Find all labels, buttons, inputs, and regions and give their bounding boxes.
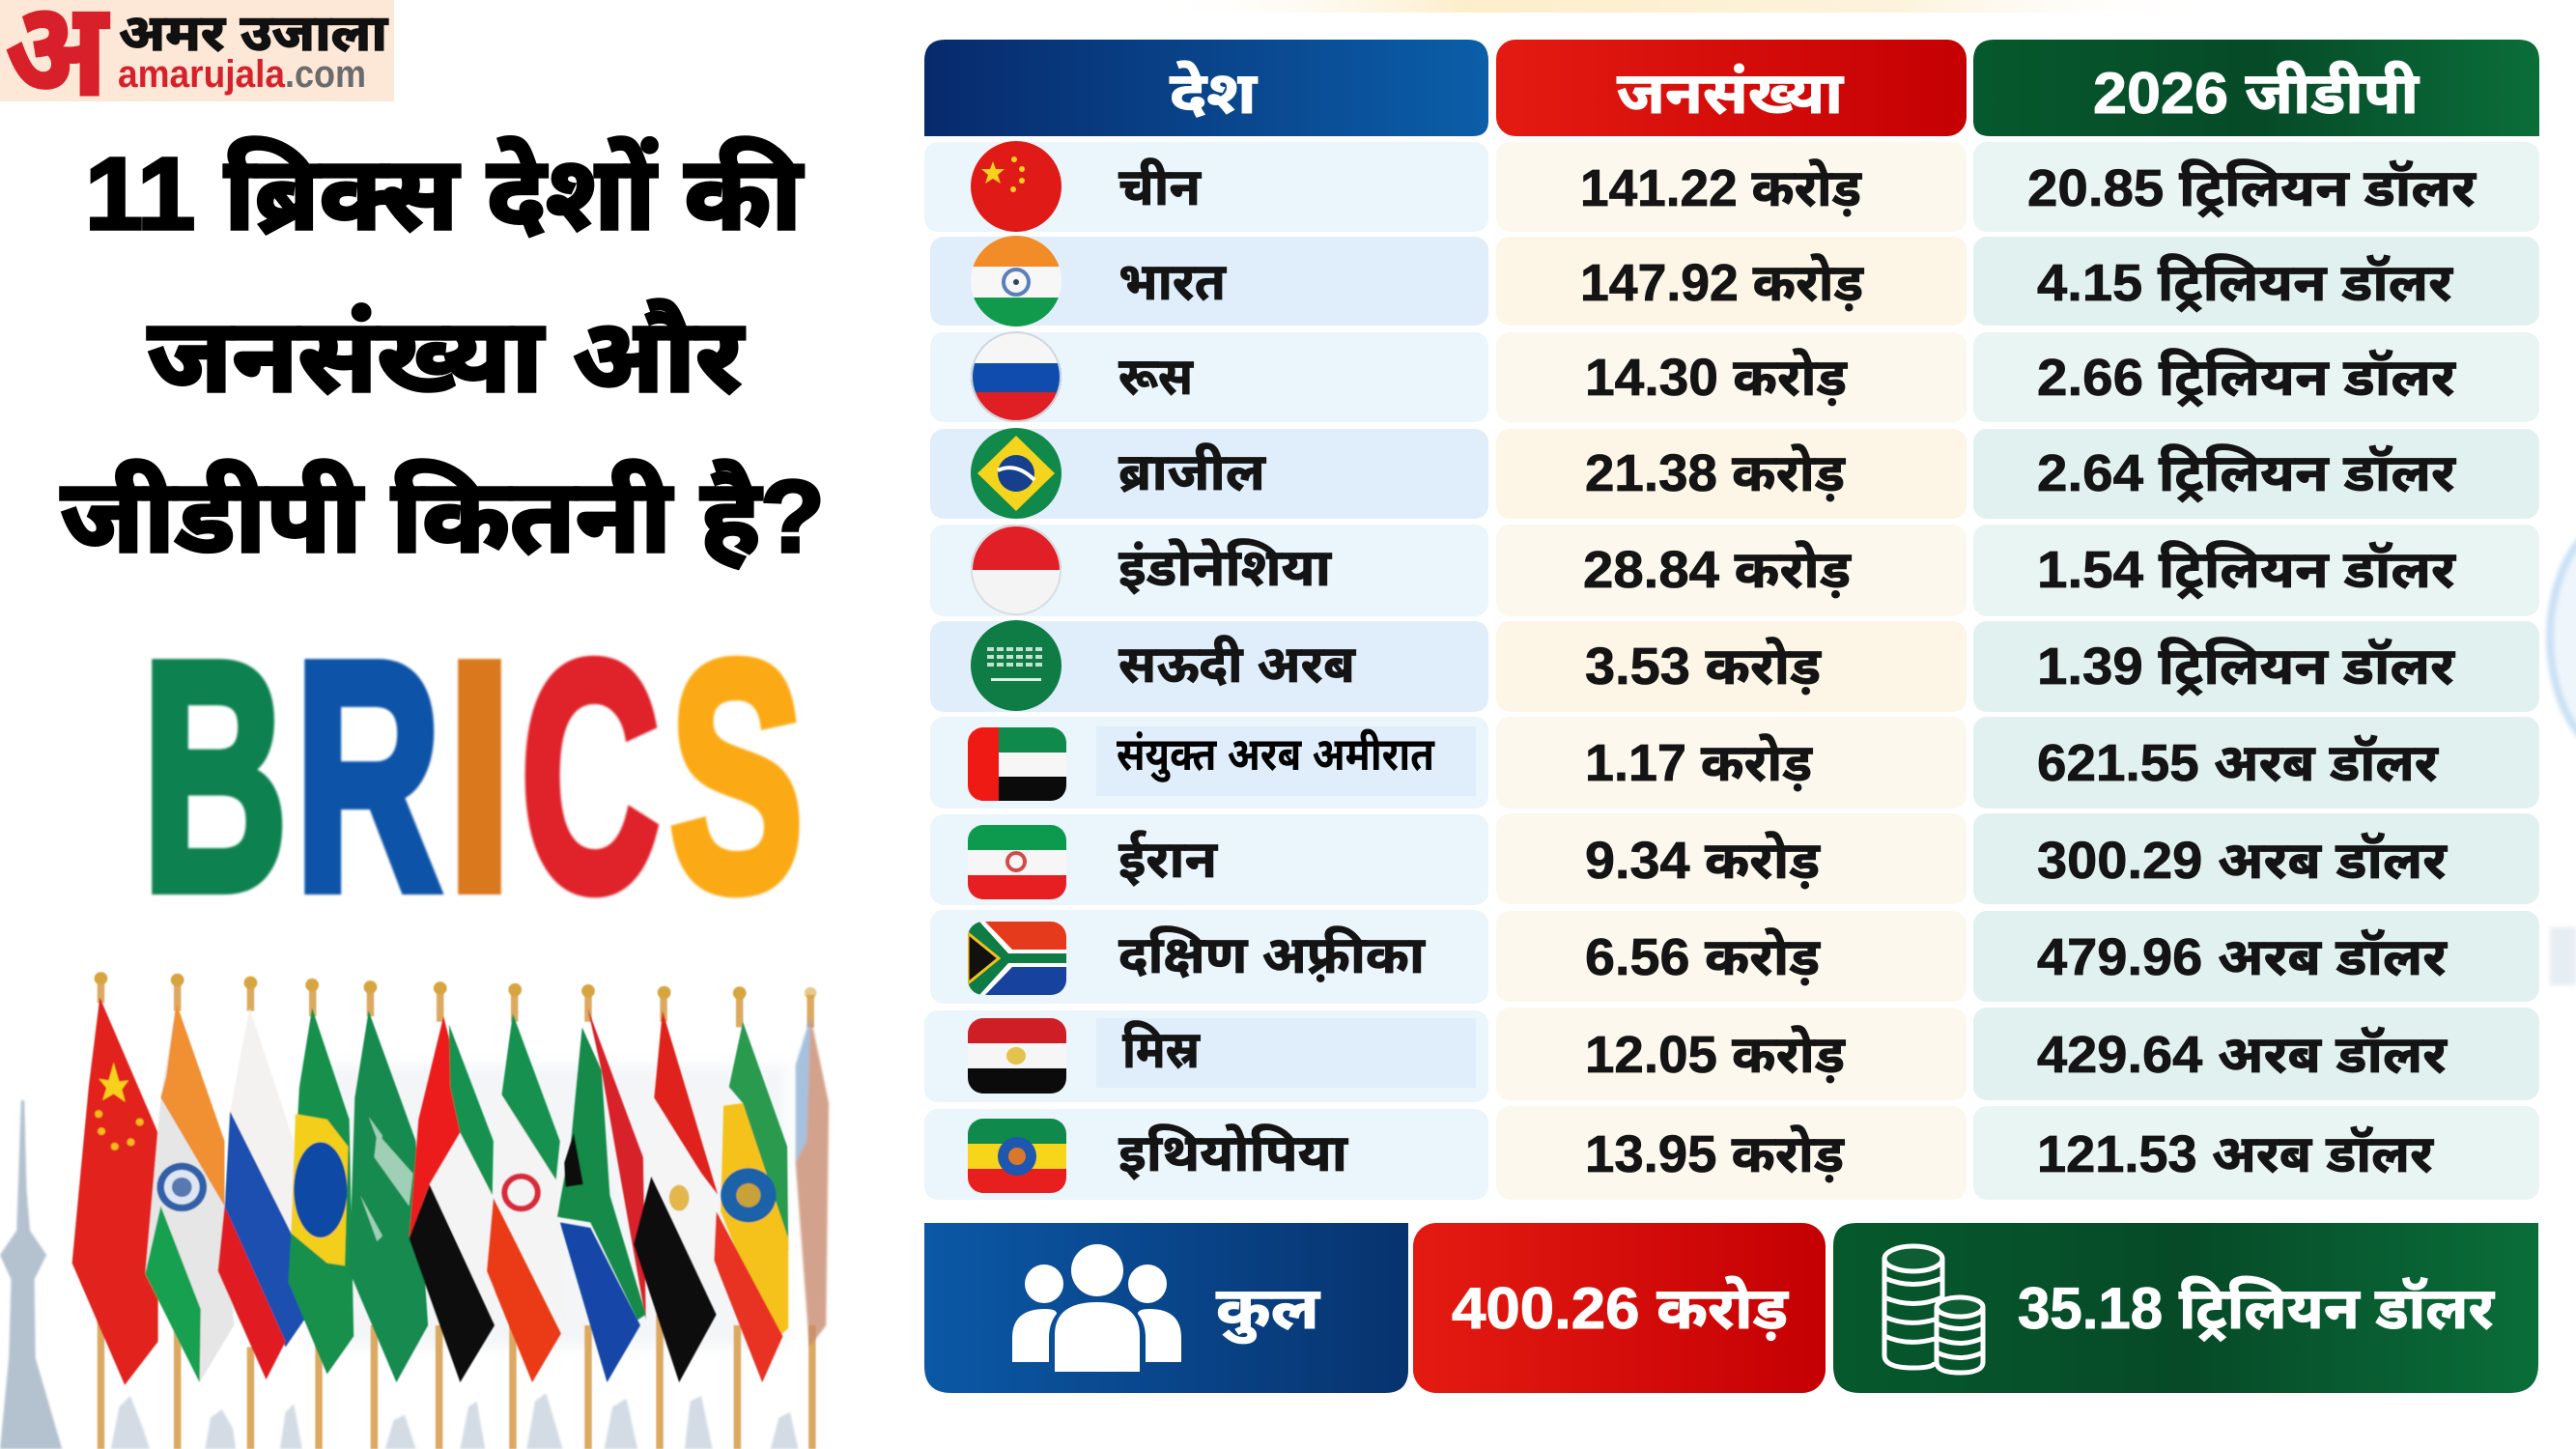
row: UAE: संयुक्त अरब अमीरात <box>1117 728 1435 781</box>
flag: Saudi Arabia <box>350 1011 428 1382</box>
row: China: चीन <box>1118 157 1203 216</box>
row: Brazil <box>930 425 2539 522</box>
total: population: 400.26 करोड़ <box>1452 1276 1789 1341</box>
BRICS wordmark: R <box>295 595 441 958</box>
row: UAE: 1.17 करोड़ <box>1585 733 1813 792</box>
flag: Russia <box>218 1009 306 1379</box>
BRICS wordmark: I <box>446 595 513 958</box>
row: South Africa <box>930 910 2539 1004</box>
flag: UAE <box>410 1016 495 1382</box>
row: Indonesia: इंडोनेशिया <box>1118 538 1332 597</box>
row: Russia: 2.66 ट्रिलियन डॉलर <box>2037 348 2456 408</box>
row: Egypt <box>924 1008 2539 1102</box>
row: UAE: 621.55 अरब डॉलर <box>2037 734 2439 792</box>
flag: faded <box>796 1016 829 1347</box>
row: Egypt: 429.64 अरब डॉलर <box>2037 1026 2448 1084</box>
row: China: 141.22 करोड़ <box>1580 158 1862 217</box>
row: Iran: 9.34 करोड़ <box>1585 831 1821 890</box>
BRICS wordmark: B <box>142 595 288 958</box>
row: Iran: ईरान <box>1118 830 1219 889</box>
row: South Africa: दक्षिण अफ़्रीका <box>1118 925 1426 984</box>
row: India: भारत <box>1118 253 1227 311</box>
row: South Africa: 479.96 अरब डॉलर <box>2037 928 2448 986</box>
title <box>61 136 825 574</box>
row: Ethiopia <box>924 1106 2539 1200</box>
row: Ethiopia: 13.95 करोड़ <box>1585 1124 1845 1183</box>
BRICS wordmark <box>142 595 804 958</box>
row: Ethiopia: इथियोपिया <box>1118 1123 1348 1182</box>
row: Indonesia: 1.54 ट्रिलियन डॉलर <box>2037 540 2456 600</box>
row: Brazil: 2.64 ट्रिलियन डॉलर <box>2037 443 2456 503</box>
flag: India <box>145 1003 234 1382</box>
row: Russia <box>930 328 2539 427</box>
flag: Egypt <box>634 1011 718 1382</box>
row: South Africa: 6.56 करोड़ <box>1585 927 1821 986</box>
total: population <box>1413 1223 1826 1393</box>
table header: GDP <box>1973 40 2539 136</box>
flag: Ethiopia <box>714 1022 788 1382</box>
row: China <box>924 141 2539 232</box>
row: Iran: 300.29 अरब डॉलर <box>2037 832 2448 890</box>
total: label with people icon: कुल <box>1216 1276 1321 1345</box>
logo: Amar Ujala: अमर उजाला <box>119 6 389 62</box>
row: Indonesia <box>930 522 2539 618</box>
BRICS wordmark: S <box>669 595 804 958</box>
table header: GDP: 2026 जीडीपी <box>2093 61 2420 126</box>
icon: coins <box>1884 1246 1983 1373</box>
row: Indonesia: 28.84 करोड़ <box>1583 540 1852 599</box>
row: Russia: 14.30 करोड़ <box>1585 348 1848 407</box>
flag: China <box>72 997 158 1385</box>
row: Egypt: मिस्र <box>1122 1020 1202 1079</box>
row: Saudi Arabia: सऊदी अरब <box>1118 635 1357 694</box>
title: जीडीपी कितनी है? <box>61 459 825 574</box>
row: Saudi Arabia: 3.53 करोड़ <box>1585 637 1822 696</box>
table header: country: देश <box>1170 61 1259 126</box>
row: Ethiopia: 121.53 अरब डॉलर <box>2037 1125 2434 1183</box>
total: GDP with coins icon: 35.18 ट्रिलियन डॉलर <box>2018 1276 2496 1341</box>
icon: people <box>1012 1244 1181 1372</box>
row: Russia: रूस <box>1118 348 1194 406</box>
logo: Amar Ujala: .com <box>285 53 366 96</box>
row: India: 4.15 ट्रिलियन डॉलर <box>2037 253 2453 313</box>
table header: population <box>1496 40 1967 136</box>
total: label with people icon <box>924 1223 1408 1393</box>
table header: country <box>924 40 1488 136</box>
title: 11 ब्रिक्स देशों की <box>85 136 804 251</box>
logo: Amar Ujala <box>0 0 394 123</box>
row: China: 20.85 ट्रिलियन डॉलर <box>2027 158 2477 218</box>
row: India <box>930 232 2539 332</box>
title: जनसंख्या और <box>148 299 745 413</box>
row: Brazil: ब्राजील <box>1118 442 1266 501</box>
row: Egypt: 12.05 करोड़ <box>1585 1025 1846 1084</box>
row: Iran <box>930 813 2539 905</box>
flag: Brazil <box>288 1009 354 1375</box>
total: GDP with coins icon <box>1833 1223 2538 1393</box>
flag: South Africa <box>557 1009 646 1382</box>
BRICS wordmark: C <box>521 595 660 958</box>
row: India: 147.92 करोड़ <box>1580 253 1864 312</box>
row: Saudi Arabia: 1.39 ट्रिलियन डॉलर <box>2037 637 2455 696</box>
table header: population: जनसंख्या <box>1617 61 1844 126</box>
logo: Amar Ujala: amarujala <box>118 53 286 96</box>
row: UAE <box>930 717 2539 809</box>
flags illustration with skyline <box>0 971 831 1449</box>
flag: Iran <box>487 1013 567 1382</box>
row: Brazil: 21.38 करोड़ <box>1585 443 1846 502</box>
row: Saudi Arabia <box>930 618 2539 715</box>
